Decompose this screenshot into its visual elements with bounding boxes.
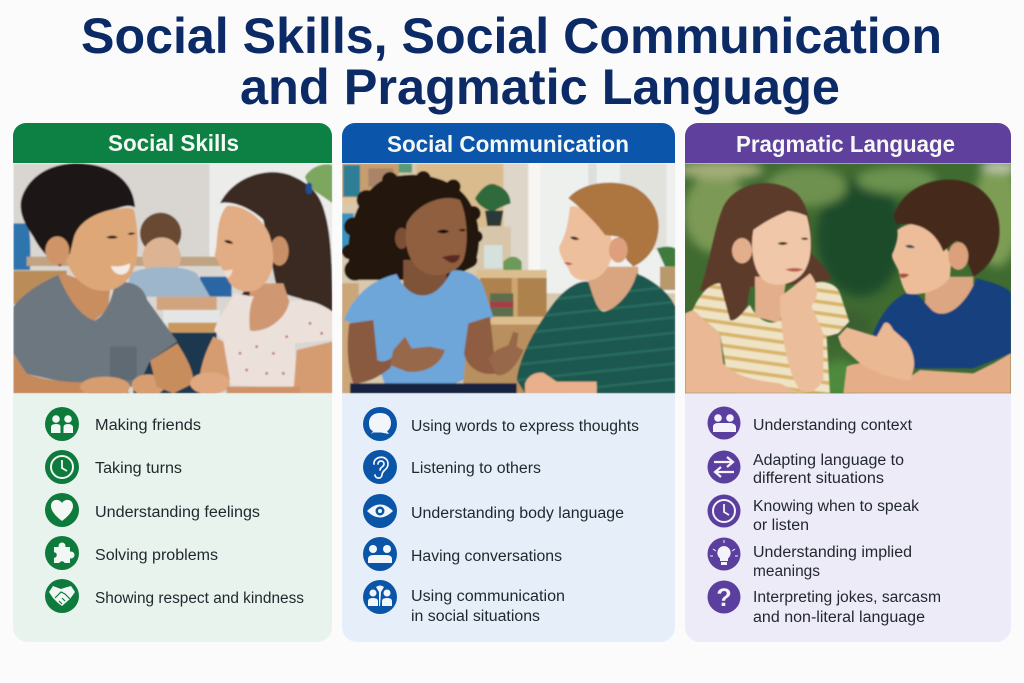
icon: arrows (708, 450, 740, 484)
text: Solving problems (95, 547, 218, 564)
girl (342, 171, 483, 281)
panel: social communication (342, 123, 675, 642)
list: social skills (45, 407, 304, 613)
text: in social situations (411, 608, 540, 625)
icon: clock (708, 494, 740, 528)
photo: girl and boy talking by a shelf (342, 163, 675, 393)
boy (925, 277, 973, 317)
text: Using words to express thoughts (411, 418, 639, 435)
girl (700, 183, 832, 327)
heading: pragmatic language (685, 123, 1011, 163)
text: different situations (753, 470, 884, 487)
icon: speech bubble (363, 407, 397, 441)
text: Understanding feelings (95, 504, 260, 521)
text (753, 544, 912, 580)
heading: social communication (342, 123, 675, 163)
panel body (13, 300, 332, 642)
text: Understanding implied (753, 544, 912, 561)
text: Having conversations (411, 548, 562, 565)
text: or listen (753, 517, 809, 534)
text: Showing respect and kindness (95, 590, 304, 607)
text: Interpreting jokes, sarcasm (753, 589, 941, 606)
icon: heart (45, 493, 79, 527)
panel body (342, 300, 675, 642)
title: and Pragmatic Language (240, 59, 840, 115)
icon: question mark: ? (716, 584, 732, 612)
text: meanings (753, 563, 820, 580)
icon: clock (45, 450, 79, 484)
icon: handshake (45, 579, 79, 613)
heading: social skills (13, 123, 332, 163)
panel body (685, 300, 1011, 642)
back of boy (58, 273, 110, 322)
icon: question mark (708, 580, 740, 614)
text: Listening to others (411, 460, 541, 477)
panel: pragmatic language (677, 123, 1020, 642)
icon: group (363, 580, 397, 614)
icon: light bulb (708, 538, 740, 570)
icon: eye (363, 494, 397, 528)
text (753, 498, 919, 534)
icon: ear (363, 450, 397, 484)
text: Using communication (411, 588, 565, 605)
text: Knowing when to speak (753, 498, 919, 515)
text: Adapting language to (753, 452, 904, 469)
photo: boy and girl talking in a classroom (13, 163, 332, 397)
boy (588, 267, 638, 310)
list: pragmatic language (708, 406, 941, 626)
heading: pragmatic language: Pragmatic Language (736, 131, 955, 157)
icon: puzzle (45, 536, 79, 570)
icon: people (708, 406, 740, 440)
text (753, 452, 904, 487)
heading: social skills: Social Skills (108, 130, 239, 156)
list: social communication (363, 407, 639, 625)
text: Making friends (95, 417, 201, 434)
text: Understanding context (753, 417, 913, 434)
title (81, 8, 942, 115)
text (753, 589, 941, 626)
girl (220, 172, 332, 312)
panel: social skills (13, 123, 332, 642)
icon: friends (45, 407, 79, 441)
photo: girl and boy talking outdoors (677, 160, 1020, 400)
text: and non-literal language (753, 609, 925, 626)
text: Taking turns (95, 460, 182, 477)
text: Understanding body language (411, 505, 624, 522)
icon: people talking (363, 537, 397, 571)
heading: social communication: Social Communication (387, 131, 629, 157)
title: Social Skills, Social Communication (81, 8, 942, 64)
